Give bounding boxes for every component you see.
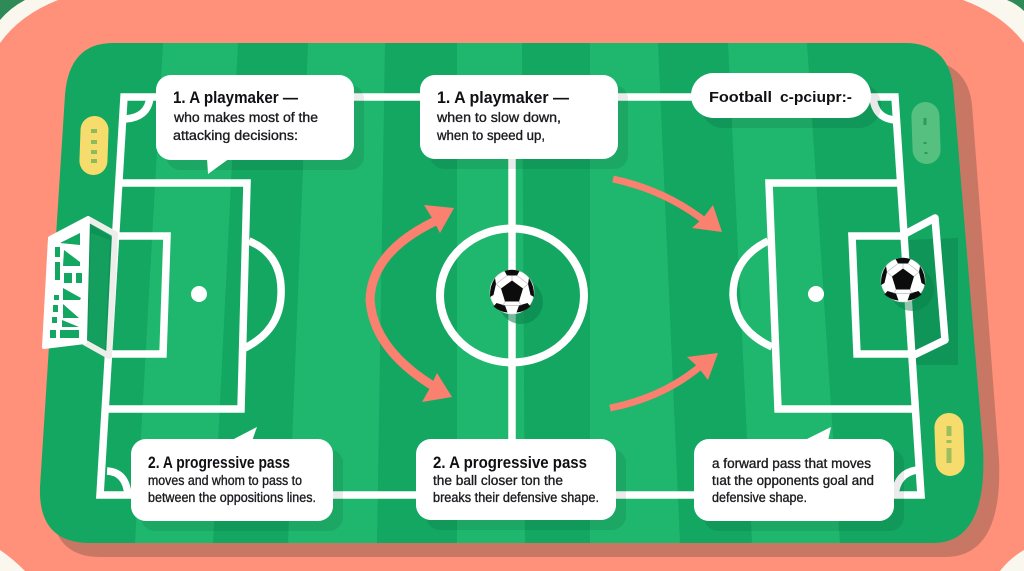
penalty spot left bbox=[191, 286, 207, 302]
callout: progressive pass, whom to pass to: moves and whom to pass to bbox=[148, 473, 302, 488]
callout: forward pass definition: defensive shape. bbox=[712, 490, 807, 505]
arrow: upper right curve bbox=[613, 179, 722, 232]
bottom-right stadium corner bbox=[1000, 550, 1024, 571]
callout: football title pill: c-pciupr:- bbox=[780, 89, 852, 106]
top-right stadium corner bbox=[963, 0, 1024, 43]
callout: football title pill: Football bbox=[709, 89, 772, 106]
centre ball shadow bbox=[499, 280, 543, 324]
callout: progressive pass, defensive shape bbox=[416, 439, 626, 530]
arrow: lower right curve bbox=[610, 353, 718, 408]
right goal frame bbox=[905, 218, 945, 356]
pitch markings bbox=[100, 97, 921, 495]
right yellow pad bbox=[934, 412, 965, 476]
bottom-left stadium corner bbox=[0, 550, 25, 571]
callout: forward pass definition bbox=[694, 427, 904, 531]
top-left stadium corner bbox=[0, 0, 58, 43]
arrow: upper left curve bbox=[370, 205, 454, 302]
callout: football title pill bbox=[691, 73, 881, 128]
callout: playmaker decisions bbox=[156, 75, 364, 174]
callout: progressive pass, whom to pass to: 2. A progressive pass bbox=[148, 454, 290, 472]
callout: forward pass definition: tıat the opponents goal and bbox=[712, 473, 874, 488]
callout: progressive pass, whom to pass to: between the oppositions lines. bbox=[148, 490, 316, 505]
callout: playmaker decisions: who makes most of the bbox=[173, 110, 318, 125]
left goal with net bbox=[44, 218, 115, 356]
callout: playmaker decisions: 1. A playmaker — bbox=[173, 89, 298, 107]
callout: playmaker tempo: 1. A playmaker — bbox=[437, 89, 569, 107]
penalty spot right bbox=[808, 286, 824, 302]
callout: playmaker decisions: attacking decisions: bbox=[173, 128, 298, 143]
left yellow pad bbox=[79, 116, 109, 175]
callout: progressive pass, whom to pass to bbox=[131, 427, 343, 531]
callout: progressive pass, defensive shape: breaks their defensive shape. bbox=[433, 490, 599, 505]
right goal shadow bbox=[908, 238, 958, 365]
right football bbox=[881, 258, 925, 302]
centre football bbox=[490, 270, 534, 314]
callout: forward pass definition: a forward pass that moves bbox=[712, 456, 871, 471]
right green pad bbox=[911, 102, 941, 164]
callout: progressive pass, defensive shape: the ball closer ton the bbox=[433, 473, 563, 488]
callout: progressive pass, defensive shape: 2. A progressive pass bbox=[433, 454, 587, 472]
arrow: lower left curve bbox=[370, 298, 452, 402]
callout: playmaker tempo: when to slow down, bbox=[436, 110, 561, 125]
callout: playmaker tempo bbox=[420, 75, 628, 169]
callout: playmaker tempo: when to speed up, bbox=[436, 128, 545, 143]
right ball shadow bbox=[890, 267, 934, 311]
